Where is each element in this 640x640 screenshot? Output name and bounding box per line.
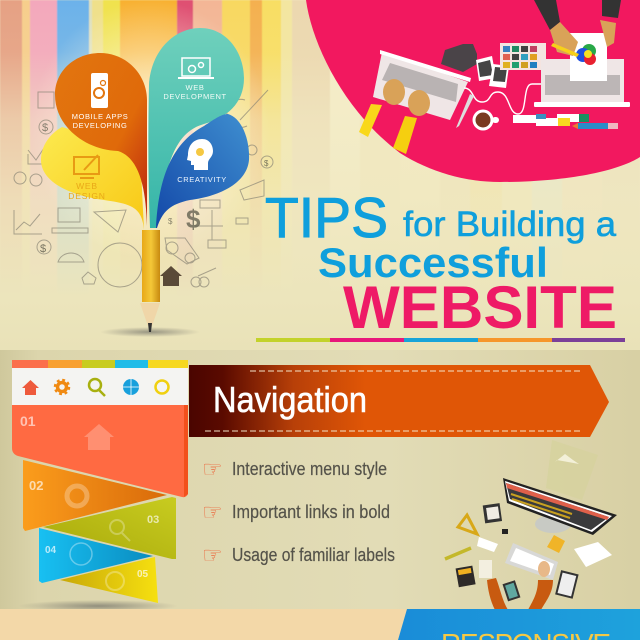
icon: small house doodle — [160, 266, 182, 286]
icon: monitor and pen — [74, 155, 99, 178]
icon: globe — [123, 379, 139, 395]
left laptop — [373, 50, 471, 120]
colour swatch palette — [500, 43, 546, 70]
ribbon 04 blue: 04 — [45, 545, 57, 556]
icon: head with bulb — [187, 139, 213, 170]
sketch doodles behind the pencil tree — [14, 90, 273, 287]
ribbon 04 blue — [39, 528, 153, 583]
title — [265, 186, 617, 341]
keyboard and hands — [479, 543, 558, 610]
petal: web design: WEB — [76, 181, 98, 191]
camera — [441, 44, 477, 72]
petal: web design: DESIGN — [68, 191, 106, 201]
bullet: important links in bold: Important links in bold — [232, 502, 390, 522]
pen — [456, 94, 474, 128]
tablet, triangle, ruler, envelope — [445, 503, 502, 559]
polaroid photos — [476, 56, 509, 88]
icon: home — [22, 380, 39, 395]
title line: TIPS for Building a: for Building a — [403, 205, 617, 244]
suited arms from top — [534, 0, 621, 57]
title line: TIPS for Building a: TIPS — [265, 186, 388, 250]
petal: web design — [41, 127, 144, 230]
bullet: interactive menu style — [202, 457, 387, 483]
text: $ — [186, 204, 201, 234]
petal: mobile apps developing: MOBILE APPS — [72, 112, 128, 121]
desk illustration — [445, 440, 617, 610]
ribbon 03 green: 03 — [147, 514, 159, 526]
icon: refresh ring — [156, 380, 168, 394]
bullet: interactive menu style: ☞ — [202, 457, 223, 483]
white icon bar — [12, 368, 188, 405]
yellow sleeves and hands — [359, 79, 430, 154]
petal: creativity: CREATIVITY — [177, 175, 227, 184]
faint wireframes — [546, 440, 598, 500]
bullet: interactive menu style: Interactive menu style — [232, 459, 387, 479]
text: $ — [42, 122, 48, 134]
icon: laptop with gears — [178, 58, 214, 78]
ribbon 01 red — [12, 405, 188, 497]
colour tab strip — [12, 360, 188, 368]
petal: mobile apps developing — [55, 53, 147, 226]
title line: TIPS for Building a — [265, 186, 617, 250]
panel: pink workspace illustration — [306, 0, 640, 182]
coffee cup — [472, 110, 499, 130]
ribbon 03 green — [43, 497, 176, 559]
background: top section with colour stripes — [0, 0, 640, 350]
title line: WEBSITE: WEBSITE — [343, 274, 617, 341]
petal: creativity — [156, 114, 249, 228]
pencil — [140, 230, 160, 332]
faint ribbon icons — [67, 486, 130, 590]
web tabs and pencil — [513, 114, 618, 129]
bullet: usage of familiar labels: ☞ — [202, 543, 223, 569]
right laptop with colour wheel sheet — [534, 33, 630, 107]
bullet list — [202, 457, 395, 569]
text: $ — [168, 217, 173, 226]
panel: navigation section — [0, 350, 640, 612]
text: $ — [264, 159, 269, 168]
icon: magnifier — [89, 379, 105, 396]
pencil tree: shadow, pencil and four petals — [41, 28, 249, 337]
cable — [464, 84, 542, 114]
petal: web development — [148, 28, 244, 228]
ribbon 05 yellow — [60, 557, 158, 603]
panel: next section strip — [0, 609, 640, 640]
pencil shadow — [100, 327, 200, 337]
monitor — [503, 478, 617, 535]
title line: Successful: Successful — [318, 239, 548, 286]
bullet: usage of familiar labels — [202, 543, 395, 569]
calculator, tablet, clipboard, sticky note, papers — [456, 529, 612, 601]
ribbon menu — [12, 360, 188, 603]
petal: web development: WEB — [186, 83, 204, 92]
ribbon 05 yellow: 05 — [137, 569, 149, 580]
bullet: usage of familiar labels: Usage of familiar labels — [232, 545, 395, 565]
shadow under ribbon menu — [18, 600, 178, 612]
bullet: important links in bold — [202, 500, 390, 526]
petal: web development: DEVELOPMENT — [163, 92, 227, 101]
icon: gear — [55, 380, 69, 394]
ribbon 02 orange — [23, 460, 167, 531]
ribbon 02 orange: 02 — [29, 478, 43, 493]
ribbon 01 red: 01 — [20, 413, 36, 429]
petal: mobile apps developing: DEVELOPING — [73, 121, 127, 130]
icon: phone with gears — [91, 73, 108, 108]
title underline in five colours — [256, 338, 625, 342]
navigation banner — [189, 365, 609, 437]
bullet: important links in bold: ☞ — [202, 500, 223, 526]
text: $ — [40, 243, 46, 255]
navigation banner: Navigation — [213, 379, 367, 420]
